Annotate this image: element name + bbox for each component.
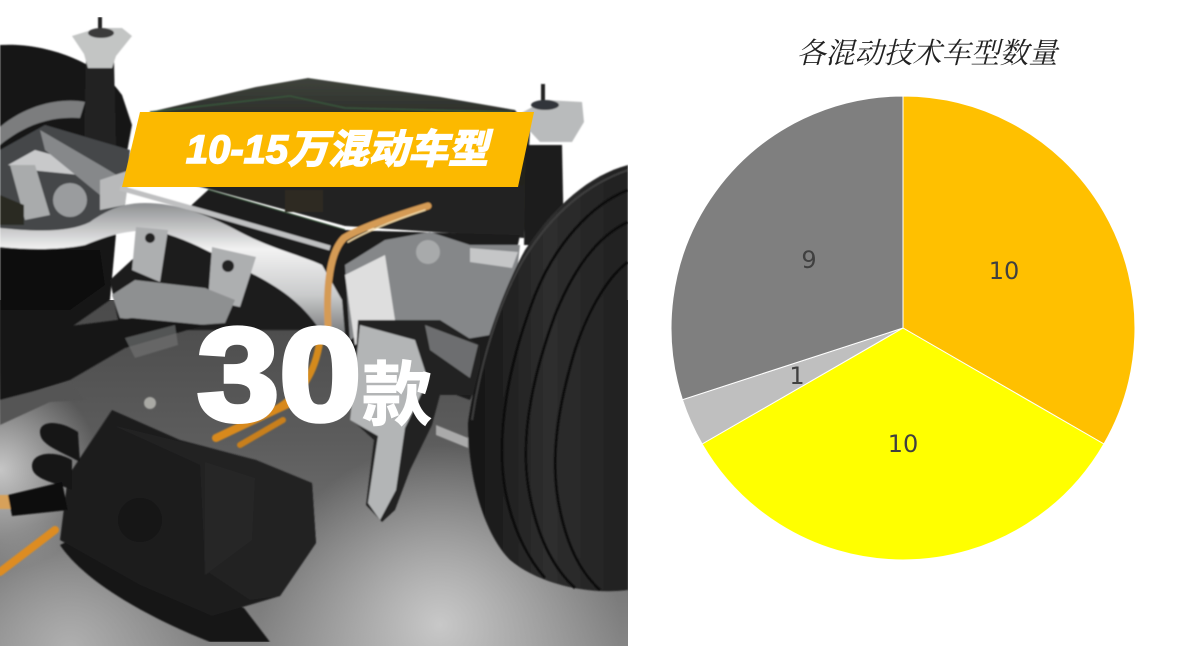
big number: 30款: 款	[362, 356, 432, 434]
left suspension mechanism	[0, 125, 130, 240]
orange cables	[0, 206, 428, 572]
dark under-body	[110, 190, 520, 400]
black cross bar	[0, 318, 205, 402]
gear housing	[112, 280, 235, 326]
motor unit	[8, 397, 316, 642]
banner: 10-15万混动车型: 10-15万混动车型	[186, 128, 493, 172]
front strut	[72, 17, 132, 155]
rear strut	[516, 84, 584, 245]
slice: 10 yellow	[702, 328, 1104, 560]
left wheel	[0, 45, 132, 335]
suspension beam tube	[0, 203, 345, 335]
big number: 30款: 30	[197, 300, 361, 448]
lower control arm	[350, 320, 480, 522]
battery pack	[130, 78, 530, 238]
knuckle right	[345, 232, 520, 345]
data labels: 10	[888, 430, 918, 458]
pie chart	[672, 96, 1134, 560]
chart title: 各混动技术车型数量	[796, 38, 1058, 70]
bracket plates	[132, 227, 256, 307]
slice: 10 orange	[903, 96, 1135, 444]
slice: 1 light gray	[682, 328, 903, 444]
data labels: 10	[989, 257, 1019, 285]
panel: chassis photo illustration	[0, 17, 628, 646]
floor	[0, 300, 628, 646]
slice: 9 gray	[671, 96, 903, 400]
big number: 30款	[197, 300, 432, 448]
silver tie rods	[120, 188, 505, 318]
banner: 10-15万混动车型	[122, 112, 534, 187]
data labels: 1	[789, 362, 805, 390]
rear tyre	[468, 165, 628, 591]
data labels	[789, 246, 1019, 458]
data labels: 9	[801, 246, 817, 274]
